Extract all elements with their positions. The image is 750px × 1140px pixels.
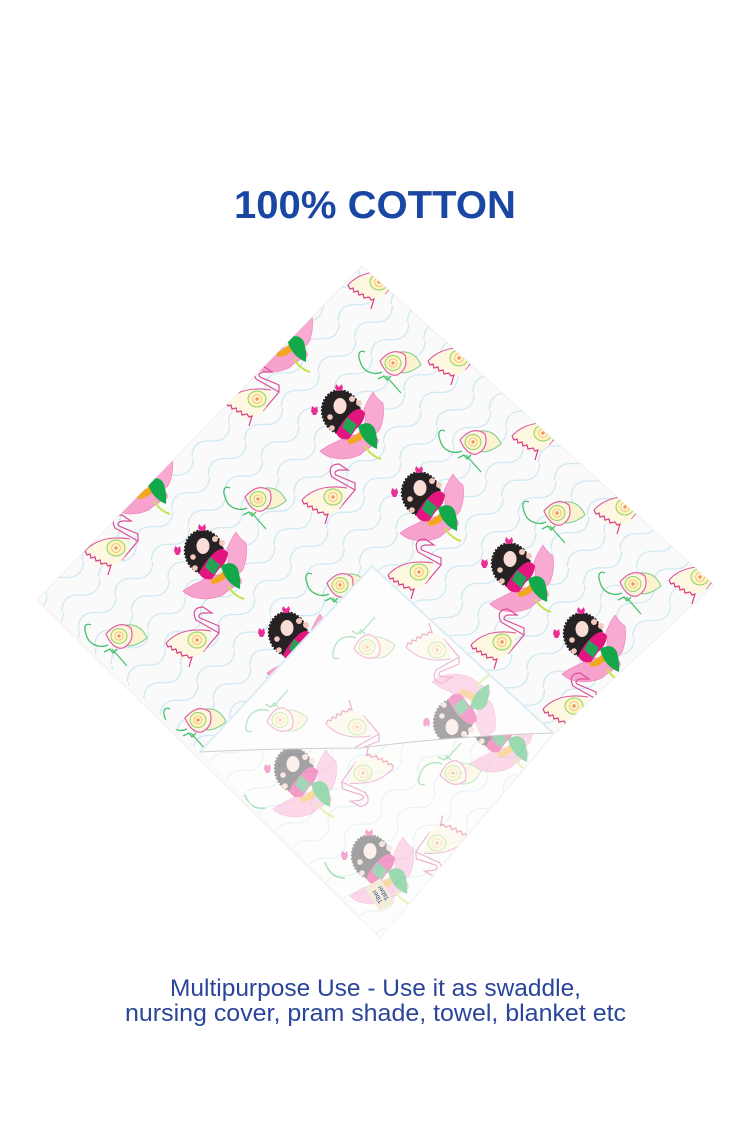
girl on lotus motifs (100, 297, 626, 682)
swaddle cloth illustration (36, 266, 714, 938)
title: 100% COTTON (234, 184, 516, 227)
elephant motifs (85, 351, 661, 750)
lower layer showing through (210, 734, 544, 938)
faded motifs (244, 734, 533, 904)
folded flap (200, 566, 553, 760)
fold crease (200, 733, 553, 752)
caption: Multipurpose Use - Use it as swaddle, (170, 975, 581, 1002)
swan motifs (85, 249, 722, 733)
caption: nursing cover, pram shade, towel, blanket etc (125, 1000, 626, 1027)
wave print (43, 269, 689, 746)
caption (125, 975, 626, 1027)
brand tag: Taber (376, 883, 391, 901)
brand tag: Tiber (371, 888, 385, 904)
faded wave print (210, 734, 544, 934)
brand tag (365, 878, 395, 912)
printed outer layer of cloth (43, 269, 712, 748)
flap see-through print (246, 617, 496, 760)
cloth base sheet (37, 266, 714, 938)
flap hem (200, 566, 553, 752)
